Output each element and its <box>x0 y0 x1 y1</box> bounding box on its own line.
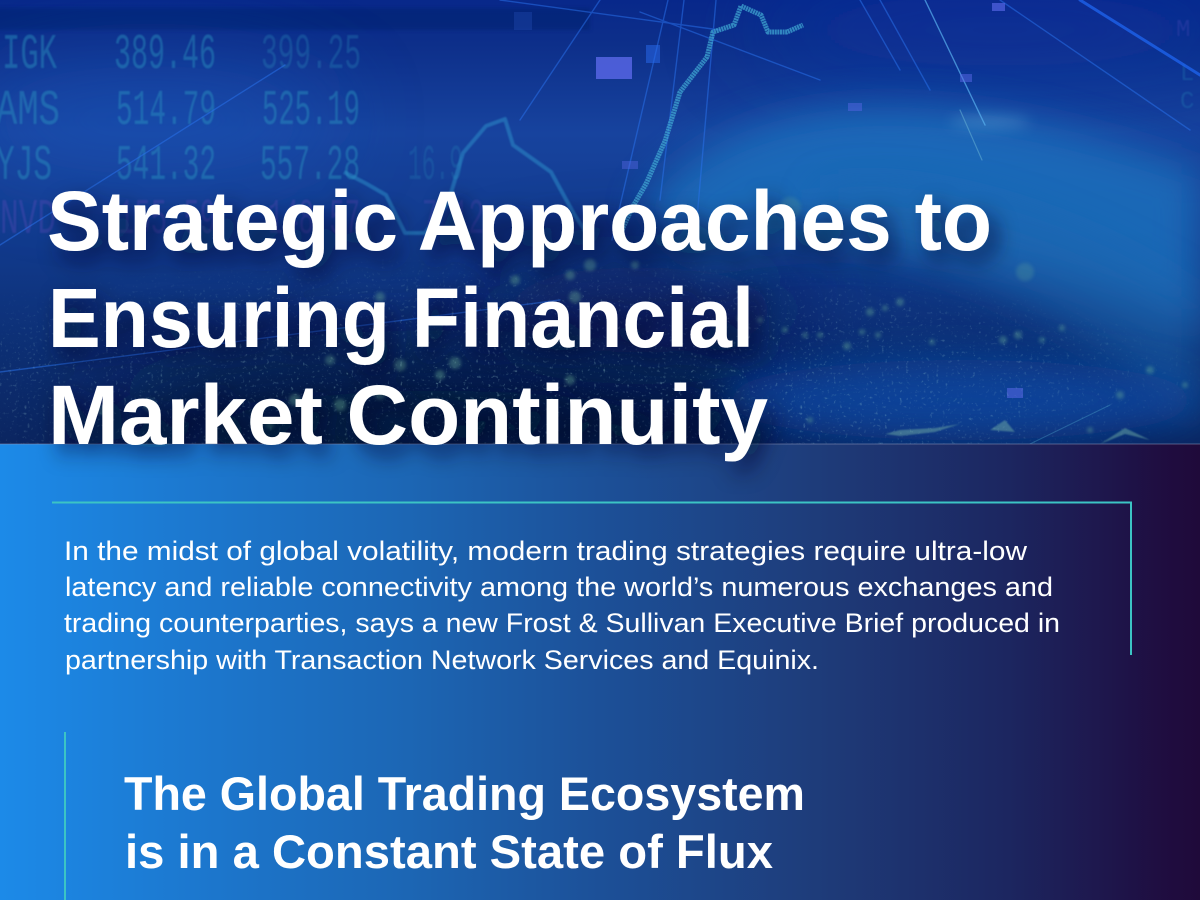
ticker numbers: 557.28 <box>260 138 360 195</box>
section heading <box>124 767 805 878</box>
ticker numbers: 399.25 <box>261 27 361 84</box>
ticker numbers: L <box>1180 61 1194 88</box>
floating data blocks <box>514 3 1023 398</box>
bottom gradient panel <box>0 444 1200 900</box>
ticker numbers <box>0 17 1194 249</box>
section heading: is in a Constant State of Flux <box>125 825 773 878</box>
intro paragraph: partnership with Transaction Network Services and Equinix. <box>65 645 819 675</box>
intro frame lines <box>52 502 1131 655</box>
ticker numbers: C <box>1180 89 1194 116</box>
speckled city lights <box>0 264 1178 444</box>
ticker numbers: 525.19 <box>262 83 360 140</box>
hero bottom edge <box>0 444 1200 445</box>
ticker numbers: 389.46 <box>114 27 216 84</box>
section heading: The Global Trading Ecosystem <box>124 767 805 820</box>
ticker numbers: 16.9 <box>408 138 463 195</box>
title: Market Continuity <box>48 368 768 462</box>
title: Strategic Approaches to <box>47 174 992 268</box>
hero background image <box>0 0 1200 490</box>
intro paragraph <box>64 536 1060 675</box>
light rays <box>0 0 1200 444</box>
ticker numbers: 541.32 <box>116 138 216 195</box>
ticker numbers: 514.79 <box>116 83 216 140</box>
ticker numbers: 155.59 <box>118 192 216 249</box>
market line chart <box>344 6 803 237</box>
title <box>47 174 992 462</box>
intro paragraph: latency and reliable connectivity among the world’s numerous exchanges and <box>65 572 1053 602</box>
ticker numbers: 148.57 <box>268 192 360 249</box>
glowing city dots <box>95 197 1188 433</box>
ticker numbers: 7.12 <box>422 192 484 249</box>
ticker numbers: NVD <box>0 192 56 249</box>
intro paragraph: trading counterparties, says a new Frost & Sullivan Executive Brief produced in <box>64 608 1060 638</box>
ticker numbers: M <box>1176 17 1190 44</box>
intro paragraph: In the midst of global volatility, modern trading strategies require ultra-low <box>64 536 1028 566</box>
title: Ensuring Financial <box>48 271 754 365</box>
section accent line <box>64 732 66 900</box>
ticker numbers: IGK <box>2 27 57 84</box>
